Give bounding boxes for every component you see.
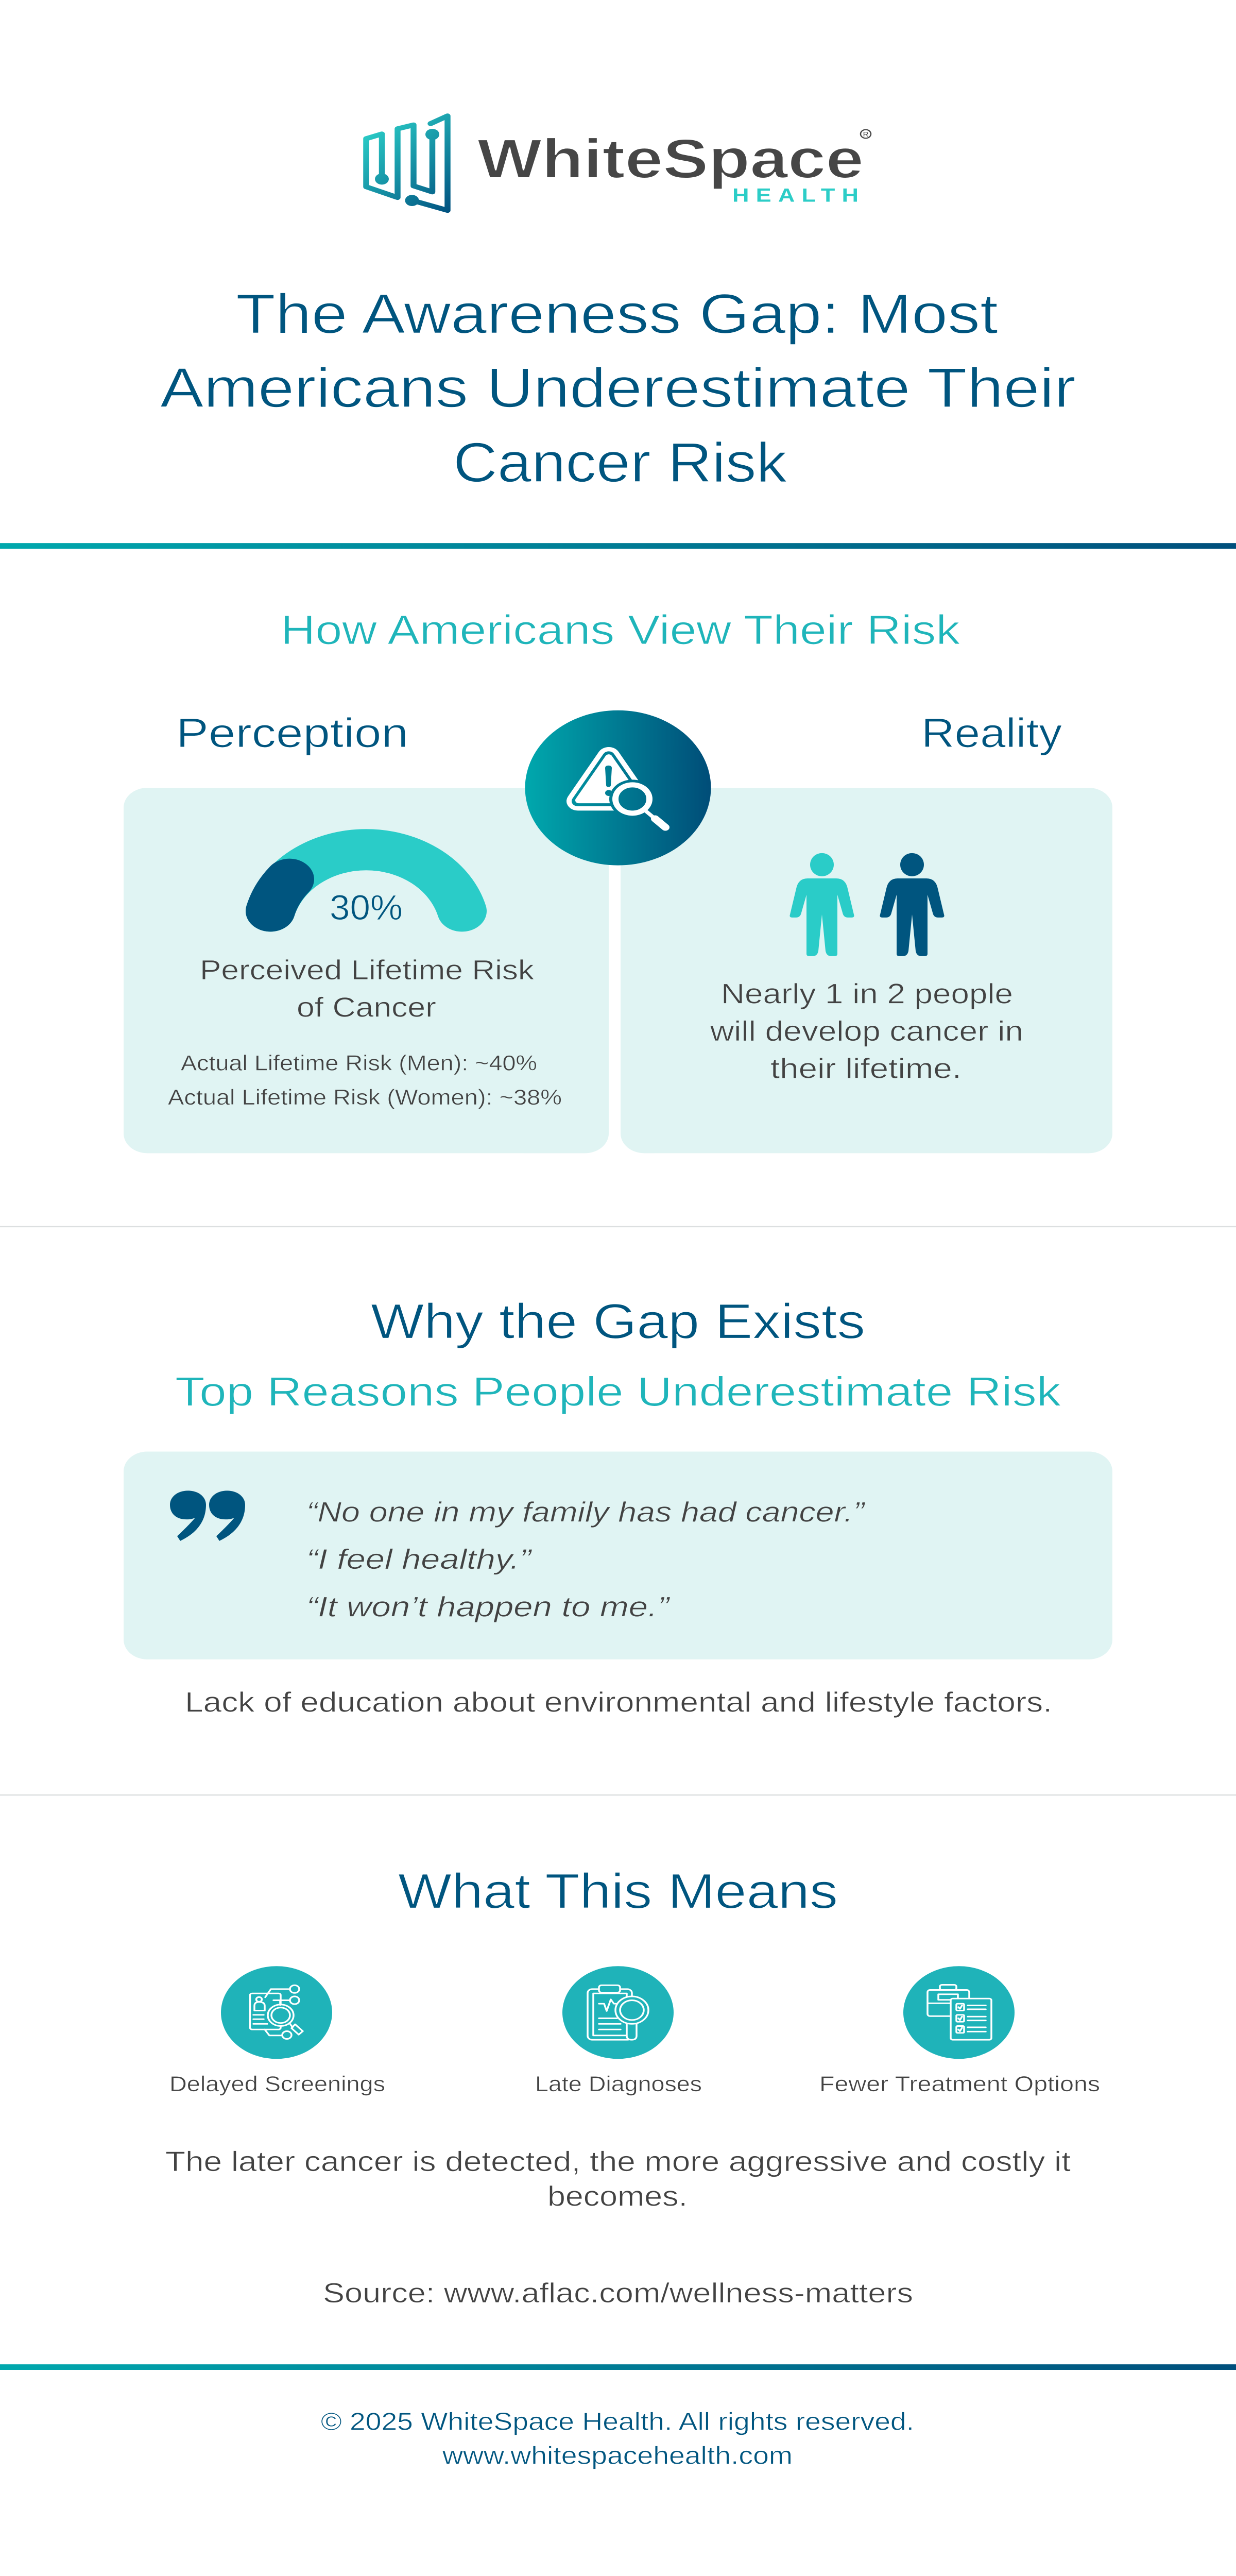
item: fewer treatment options — [819, 1966, 1100, 2096]
reality statement: Nearly 1 in 2 people — [721, 978, 1013, 1009]
label: Fewer Treatment Options — [819, 2072, 1100, 2096]
logo mark — [366, 116, 448, 210]
icon: clipboard search — [562, 1966, 674, 2059]
icon: briefcase and checklist — [903, 1966, 1015, 2059]
item: delayed screenings — [169, 1966, 385, 2096]
footer — [321, 2408, 914, 2469]
perceived risk label: Perceived Lifetime Risk — [200, 954, 534, 986]
perceived risk label: of Cancer — [297, 991, 436, 1023]
footer: © 2025 WhiteSpace Health. All rights reserved. — [321, 2408, 914, 2436]
quote list — [306, 1496, 866, 1622]
title: The Awareness Gap: Most — [236, 283, 998, 345]
panel: perception — [124, 788, 609, 1153]
reality statement: their lifetime. — [770, 1053, 962, 1084]
logo: WhiteSpace Health — [366, 116, 871, 210]
footer: www.whitespacehealth.com — [442, 2442, 793, 2469]
heading: what this means: What This Means — [398, 1863, 838, 1919]
title — [160, 283, 1076, 494]
section heading: how Americans view their risk: How Americans View Their Risk — [281, 607, 960, 653]
column heading: perception: Perception — [176, 710, 408, 756]
text: later detection statement — [165, 2145, 1071, 2212]
registered mark — [861, 130, 871, 138]
heading: why the gap exists: Why the Gap Exists — [371, 1294, 865, 1349]
actual risk figures: Actual Lifetime Risk (Women): ~38% — [168, 1085, 562, 1109]
panel: quotes — [124, 1452, 1112, 1659]
text: lack of education: Lack of education about environmental and lifestyle factors. — [185, 1686, 1052, 1718]
quote list: “No one in my family has had cancer.” — [306, 1496, 866, 1528]
text: later detection statement: becomes. — [547, 2180, 688, 2212]
icon: quotation marks — [170, 1490, 245, 1541]
logo wordmark: WhiteSpace — [477, 128, 864, 190]
registered mark: R — [863, 131, 868, 138]
icon: record search — [221, 1966, 332, 2059]
actual risk figures: Actual Lifetime Risk (Men): ~40% — [181, 1050, 537, 1075]
reality statement: will develop cancer in — [710, 1015, 1023, 1047]
icon: teal person — [790, 853, 854, 956]
gauge: 30 percent perceived risk: 30% — [330, 888, 403, 927]
perceived risk label — [200, 954, 534, 1023]
logo sub-wordmark: HEALTH — [732, 184, 859, 206]
title: Americans Underestimate Their — [160, 357, 1076, 419]
gauge: 30 percent perceived risk — [270, 850, 462, 927]
column heading: reality: Reality — [921, 710, 1062, 756]
item: late diagnoses — [535, 1966, 702, 2096]
actual risk figures — [168, 1050, 562, 1109]
label: Late Diagnoses — [535, 2072, 702, 2096]
text: later detection statement: The later cancer is detected, the more aggressive and costly it — [165, 2145, 1071, 2177]
subheading: top reasons: Top Reasons People Underestimate Risk — [175, 1368, 1061, 1415]
quote list: “I feel healthy.” — [306, 1543, 533, 1575]
icon: warning triangle with magnifier — [525, 710, 711, 866]
source: Source: www.aflac.com/wellness-matters — [323, 2278, 913, 2309]
title: Cancer Risk — [453, 432, 787, 494]
quote list: “It won’t happen to me.” — [306, 1591, 671, 1622]
reality statement — [710, 978, 1023, 1084]
label: Delayed Screenings — [169, 2072, 385, 2096]
panel: reality — [621, 788, 1112, 1153]
icon: navy person — [880, 853, 945, 956]
